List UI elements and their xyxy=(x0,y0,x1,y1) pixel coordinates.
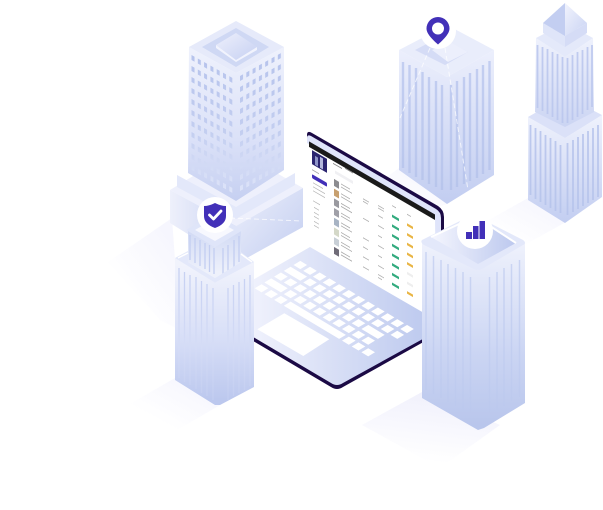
dashboard status badges xyxy=(392,215,399,289)
icon: location pin badge xyxy=(420,13,456,49)
tower podium xyxy=(170,150,303,264)
tower faces xyxy=(188,47,284,201)
building: shield tower xyxy=(175,215,254,405)
dashboard sidebar xyxy=(312,150,327,233)
dashboard header bar xyxy=(309,141,435,220)
chart tower stripes xyxy=(426,252,520,413)
tower windows xyxy=(190,50,284,197)
tower roof xyxy=(189,21,284,73)
building: stepped spire tower xyxy=(528,3,602,223)
chart tower roof xyxy=(421,215,525,270)
building: location tower xyxy=(399,25,494,204)
location tower stripes xyxy=(403,61,490,190)
icon: shield badge xyxy=(197,197,233,233)
dashed connector lines xyxy=(230,48,468,221)
dashboard tabs xyxy=(333,161,353,175)
laptop base xyxy=(204,247,470,385)
building: tall tower with windows xyxy=(170,21,303,264)
shield tower upper block xyxy=(188,215,241,278)
icon: bar chart badge xyxy=(457,213,493,249)
dashboard on the screen xyxy=(309,141,435,312)
spire upper block xyxy=(535,23,594,127)
location tower roof xyxy=(399,25,494,77)
shield tower lower block xyxy=(175,251,254,405)
building: chart tower xyxy=(421,215,525,430)
dashboard table xyxy=(334,172,411,298)
spire lower block xyxy=(528,96,602,223)
laptop trackpad xyxy=(257,313,329,356)
laptop keyboard xyxy=(255,261,413,356)
laptop screen xyxy=(307,132,444,320)
dashboard star ratings xyxy=(407,223,413,297)
spire roof xyxy=(543,3,587,47)
floor shadows xyxy=(108,168,566,468)
laptop base edge xyxy=(204,250,470,389)
laptop xyxy=(204,132,470,389)
isometric illustration xyxy=(157,3,602,430)
